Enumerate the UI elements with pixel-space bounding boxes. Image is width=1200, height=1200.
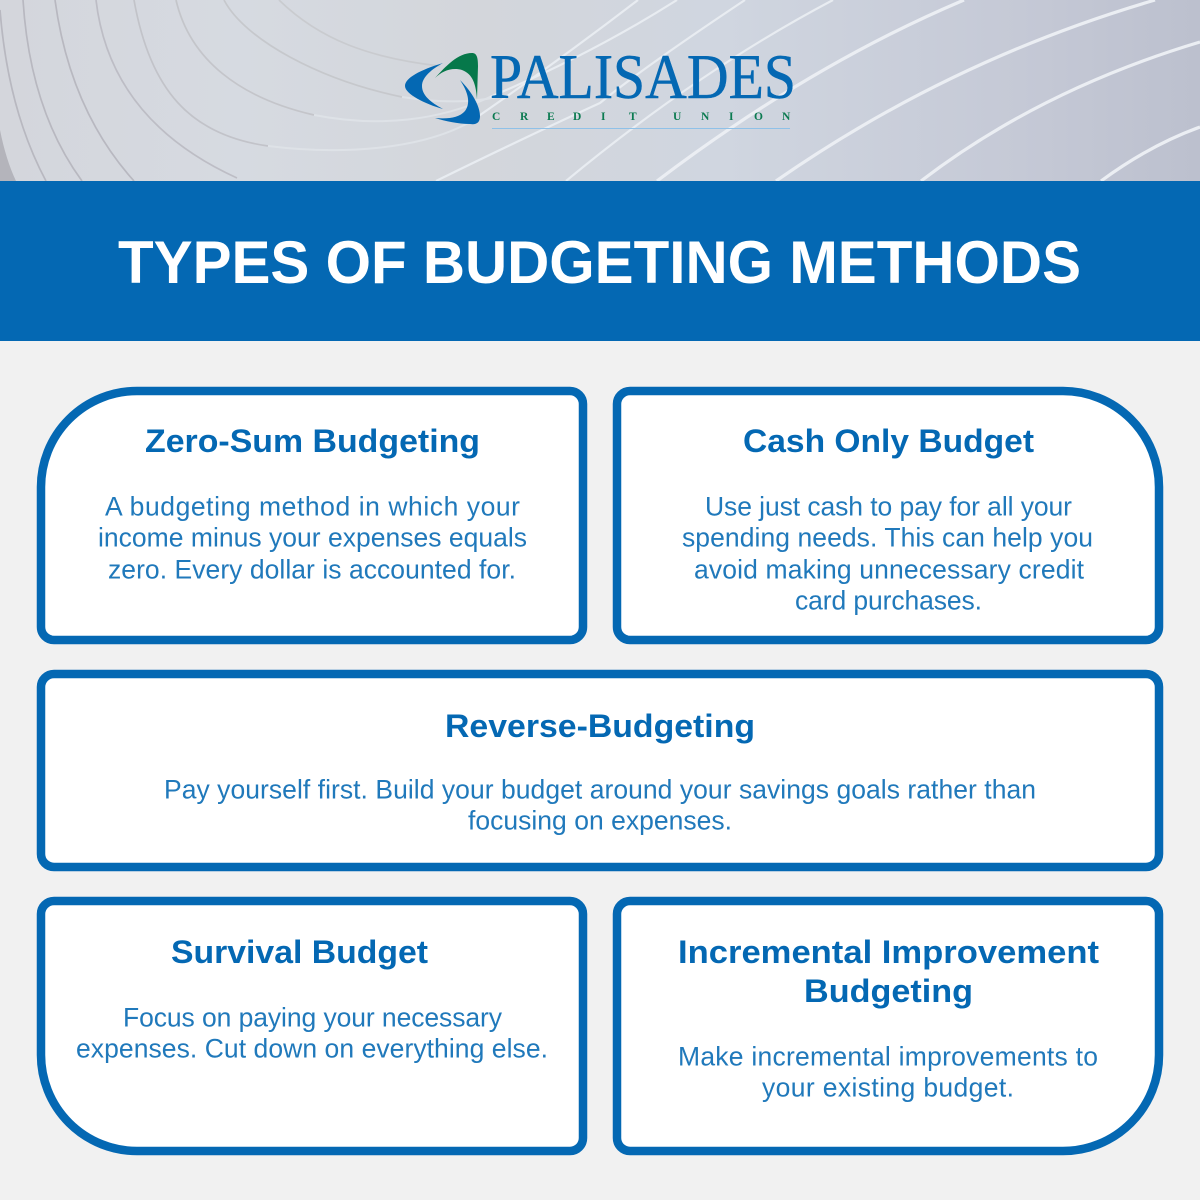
description: expenses. Cut down on everything else. [76, 1034, 548, 1064]
description [98, 492, 527, 584]
logo: Palisades Credit Union [405, 41, 796, 129]
description: income minus your expenses equals [98, 522, 527, 552]
panel: incremental improvement budgeting [617, 901, 1159, 1151]
description [682, 492, 1093, 616]
title banner [0, 181, 1200, 341]
logo tagline: CREDITUNION [492, 111, 791, 123]
heading: Zero-Sum Budgeting [145, 423, 480, 459]
description: Use just cash to pay for all your [705, 492, 1072, 522]
heading: Incremental Improvement [678, 934, 1099, 970]
description: Focus on paying your necessary [123, 1002, 503, 1032]
title: TYPES OF BUDGETING METHODS [118, 229, 1081, 296]
description: zero. Every dollar is accounted for. [108, 554, 516, 584]
logo wordmark: PALISADES [490, 41, 796, 112]
header photo: abstract curved lines [0, 0, 1200, 181]
panel: reverse-budgeting [41, 674, 1159, 867]
heading: Reverse-Budgeting [445, 708, 755, 744]
description: Pay yourself first. Build your budget around your savings goals rather than [164, 774, 1036, 804]
heading: Budgeting [804, 973, 973, 1009]
description [76, 1002, 548, 1064]
description [678, 1042, 1098, 1102]
heading: Survival Budget [171, 934, 428, 970]
icon: logo swirl [405, 53, 480, 124]
heading [678, 934, 1099, 1009]
panel: zero-sum budgeting [41, 391, 583, 640]
description: card purchases. [795, 586, 982, 616]
description [164, 774, 1036, 836]
panel: survival budget [41, 901, 583, 1151]
description: focusing on expenses. [468, 806, 732, 836]
panel: cash only budget [617, 391, 1159, 640]
description: Make incremental improvements to [678, 1042, 1098, 1072]
description: your existing budget. [762, 1072, 1014, 1102]
description: spending needs. This can help you [682, 522, 1093, 552]
heading: Cash Only Budget [743, 423, 1034, 459]
description: A budgeting method in which your [105, 492, 520, 522]
description: avoid making unnecessary credit [694, 554, 1085, 584]
